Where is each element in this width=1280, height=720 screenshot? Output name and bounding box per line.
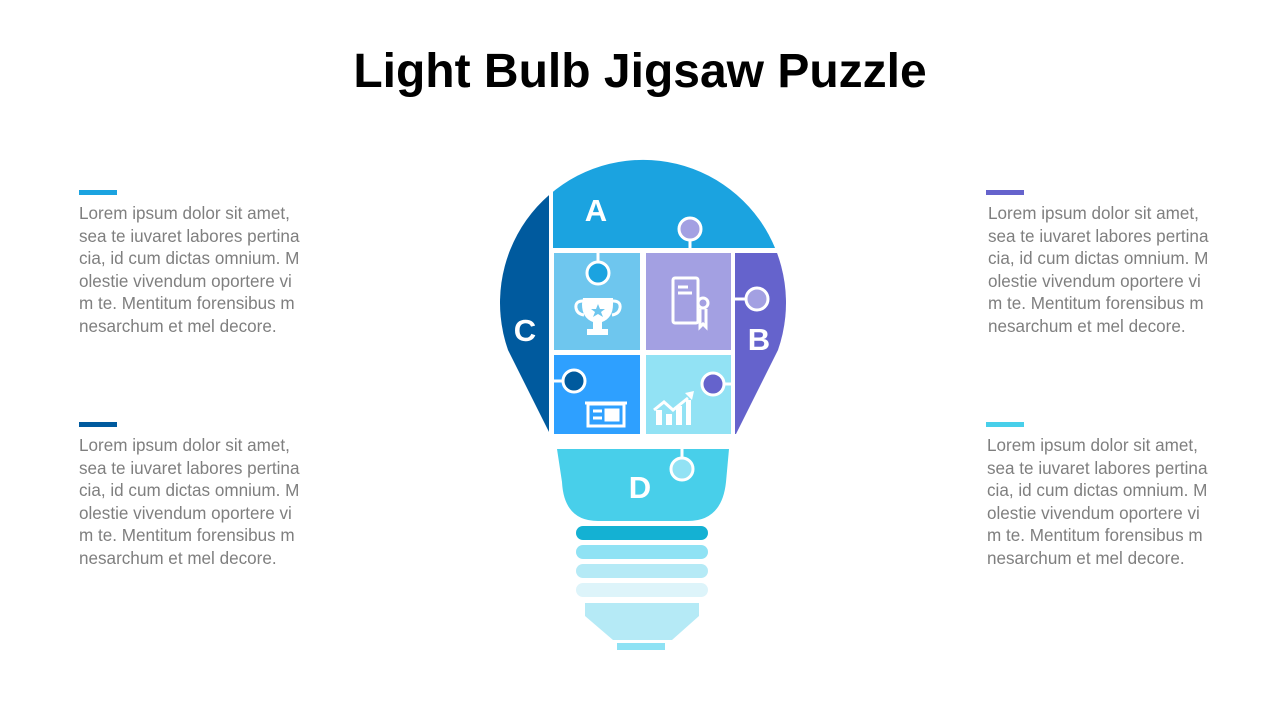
piece C [500, 195, 549, 432]
text block: top right: nesarchum et mel decore. [988, 316, 1186, 336]
text block: top left: cia, id cum dictas omnium. M [79, 249, 299, 268]
light bulb puzzle [500, 160, 786, 650]
text block: top right: m te. Mentitum forensibus m [988, 294, 1204, 313]
text block: bottom left: nesarchum et mel decore. [79, 548, 277, 568]
icon: certificate [673, 278, 708, 327]
text block: bottom right: cia, id cum dictas omnium. M [987, 481, 1207, 500]
text block: bottom right: Lorem ipsum dolor sit amet, [987, 436, 1198, 455]
text block: top left: olestie vivendum oportere vi [79, 272, 292, 290]
text block: bottom right: sea te iuvaret labores pertina [987, 458, 1207, 478]
puzzle pieces in bulb [500, 160, 786, 434]
text block: bottom left: Lorem ipsum dolor sit amet, [79, 436, 290, 455]
text block: top right: sea te iuvaret labores pertina [988, 226, 1208, 246]
text block: top left: nesarchum et mel decore. [79, 316, 277, 336]
letters [514, 193, 770, 505]
text block: top right [986, 190, 1208, 336]
text block: bottom left: sea te iuvaret labores pertina [79, 458, 299, 478]
letters: D [629, 470, 651, 505]
text block: top right: cia, id cum dictas omnium. M [988, 249, 1208, 268]
text block: bottom right [986, 422, 1208, 568]
text block: top right: Lorem ipsum dolor sit amet, [988, 204, 1199, 223]
icon: card [585, 403, 627, 426]
text block: bottom left: olestie vivendum oportere vi [79, 504, 292, 522]
tile trophy [554, 253, 640, 350]
text block: top left: sea te iuvaret labores pertina [79, 226, 299, 246]
piece B [735, 253, 786, 434]
text block: top left: m te. Mentitum forensibus m [79, 294, 295, 313]
text block: bottom right: olestie vivendum oportere vi [987, 504, 1200, 522]
letters: A [585, 193, 607, 228]
piece D [557, 449, 729, 521]
text block: bottom left: m te. Mentitum forensibus m [79, 526, 295, 545]
connectors [549, 218, 768, 480]
tile certificate [646, 253, 731, 350]
tile chart [646, 355, 731, 434]
text block: top left: Lorem ipsum dolor sit amet, [79, 204, 290, 223]
text block: bottom left [79, 422, 300, 568]
text block: bottom right: m te. Mentitum forensibus m [987, 526, 1203, 545]
tile card [554, 355, 640, 434]
text block: bottom right: nesarchum et mel decore. [987, 548, 1185, 568]
icon: trophy [576, 298, 620, 335]
title: Light Bulb Jigsaw Puzzle [353, 45, 927, 98]
base stripes [576, 526, 708, 650]
piece A [553, 160, 775, 248]
text block: top left [79, 190, 300, 336]
letters: C [514, 313, 536, 348]
text block: top right: olestie vivendum oportere vi [988, 272, 1201, 290]
text block: bottom left: cia, id cum dictas omnium. M [79, 481, 299, 500]
letters: B [748, 322, 770, 357]
icon: chart [654, 391, 694, 425]
